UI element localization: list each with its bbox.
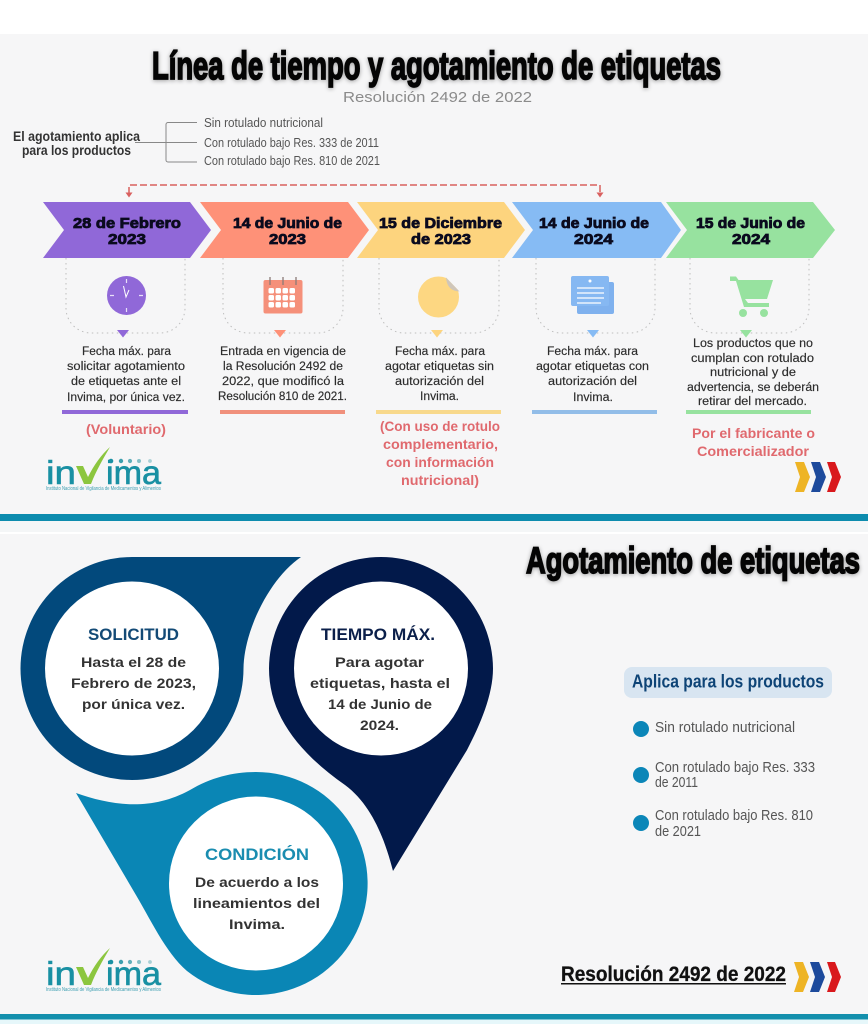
step 2: 14 de Junio de 2023: 2022, que modificó la <box>222 376 345 388</box>
bracket connector <box>135 122 197 162</box>
step 5: 15 de Junio de 2024: retirar del mercado. <box>698 396 807 408</box>
step 1: 28 de Febrero 2023: Fecha máx. para <box>82 346 172 358</box>
step 5: 15 de Junio de 2024: nutricional y de <box>710 367 796 379</box>
card: tiempo maximo: 2024. <box>360 717 399 733</box>
icon: sticker <box>418 276 460 318</box>
badge: aplica para los productos <box>624 667 832 698</box>
step 1: 28 de Febrero 2023: de etiquetas ante el <box>71 376 181 388</box>
icon: calendar <box>264 277 302 314</box>
step 2: 14 de Junio de 2023: la Resolución 2492 de <box>223 361 343 373</box>
step 3: 15 de Diciembre de 2023: nutricional) <box>401 473 479 488</box>
step 2: 14 de Junio de 2023: 14 de Junio de <box>233 215 342 232</box>
logo: invima: ima <box>106 454 162 491</box>
icon: document <box>571 276 614 314</box>
icon: tricolor chevrons <box>794 962 841 992</box>
list: productos: Con rotulado bajo Res. 810 <box>655 807 813 824</box>
step 3: 15 de Diciembre de 2023: (Con uso de rotulo <box>380 419 500 434</box>
step 3: 15 de Diciembre de 2023: 15 de Diciembre <box>379 215 502 232</box>
list: productos: Con rotulado bajo Res. 333 <box>655 759 815 776</box>
list: productos <box>633 719 815 840</box>
step 4: 14 de Junio de 2024 <box>512 202 681 414</box>
step 5: 15 de Junio de 2024: Los productos que no <box>693 338 813 350</box>
product list: Sin rotulado nutricional <box>204 115 323 130</box>
step 5: 15 de Junio de 2024 <box>666 202 835 459</box>
step 3: 15 de Diciembre de 2023: con información <box>386 455 494 470</box>
card: solicitud: SOLICITUD <box>88 625 179 644</box>
arrow: dashed range <box>126 185 604 198</box>
step 4: 14 de Junio de 2024: 2024 <box>574 231 614 248</box>
step 4: 14 de Junio de 2024: autorización del <box>548 376 637 388</box>
step 4: 14 de Junio de 2024: Fecha máx. para <box>547 346 639 358</box>
step 3: 15 de Diciembre de 2023: Invima. <box>420 391 459 403</box>
card: solicitud: Hasta el 28 de <box>81 654 186 670</box>
step 3: 15 de Diciembre de 2023 <box>357 202 525 488</box>
list: productos: de 2011 <box>655 774 698 791</box>
card: solicitud: Febrero de 2023, <box>71 675 196 691</box>
logo: invima: ima <box>106 955 162 992</box>
product list: Con rotulado bajo Res. 810 de 2021 <box>204 153 380 168</box>
step 3: 15 de Diciembre de 2023: de 2023 <box>411 231 471 248</box>
step 3: 15 de Diciembre de 2023: Fecha máx. para <box>395 346 486 358</box>
step 2: 14 de Junio de 2023: Resolución 810 de 2021. <box>218 391 347 403</box>
step 5: 15 de Junio de 2024: 2024 <box>732 231 771 248</box>
logo: invima <box>46 948 162 993</box>
footer: resolucion: Resolución 2492 de 2022 <box>561 963 786 986</box>
panel: agotamiento <box>0 534 868 1024</box>
subtitle: Resolución 2492 de 2022 <box>343 89 532 106</box>
icon: shopping cart <box>730 276 773 317</box>
card: condicion: CONDICIÓN <box>205 845 309 864</box>
step 3: 15 de Diciembre de 2023: agotar etiquetas sin <box>385 361 494 373</box>
card: solicitud <box>21 557 301 780</box>
card: condicion: De acuerdo a los <box>195 874 319 890</box>
card: tiempo maximo <box>269 557 493 871</box>
logo: invima: Instituto Nacional de Vigilancia de Medicamentos y Alimentos <box>46 987 161 993</box>
scope label: El agotamiento aplica <box>13 129 140 144</box>
step 5: 15 de Junio de 2024: Comercializador <box>697 444 810 459</box>
badge: aplica para los productos: Aplica para los productos <box>632 672 824 692</box>
logo: invima: in <box>46 454 76 491</box>
card: tiempo maximo: 14 de Junio de <box>328 696 432 712</box>
step 1: 28 de Febrero 2023: Invima, por única vez. <box>67 392 185 404</box>
step 5: 15 de Junio de 2024: Por el fabricante o <box>692 426 815 441</box>
logo: invima: in <box>46 955 76 992</box>
step 1: 28 de Febrero 2023: 28 de Febrero <box>73 215 181 232</box>
card: condicion: lineamientos del <box>193 895 320 911</box>
card: condicion: Invima. <box>229 916 285 932</box>
step 2: 14 de Junio de 2023: Entrada en vigencia de <box>220 346 346 358</box>
scope label <box>13 129 140 158</box>
step 5: 15 de Junio de 2024: advertencia, se deberán <box>687 382 819 394</box>
card: tiempo maximo: TIEMPO MÁX. <box>321 625 435 644</box>
step 3: 15 de Diciembre de 2023: complementario, <box>383 437 498 452</box>
logo: invima: Instituto Nacional de Vigilancia de Medicamentos y Alimentos <box>46 486 161 492</box>
list: productos: de 2021 <box>655 823 701 840</box>
step 4: 14 de Junio de 2024: agotar etiquetas con <box>536 361 649 373</box>
step 1: 28 de Febrero 2023: (Voluntario) <box>86 422 166 437</box>
step 1: 28 de Febrero 2023: solicitar agotamiento <box>67 361 185 373</box>
step 3: 15 de Diciembre de 2023: autorización del <box>395 376 484 388</box>
step 5: 15 de Junio de 2024: 15 de Junio de <box>696 215 805 232</box>
logo: invima <box>46 447 162 492</box>
step 4: 14 de Junio de 2024: 14 de Junio de <box>539 215 649 232</box>
product list: Con rotulado bajo Res. 333 de 2011 <box>204 135 379 150</box>
step 4: 14 de Junio de 2024: Invima. <box>573 392 613 404</box>
product list <box>204 115 380 168</box>
icon: tricolor chevrons <box>795 462 841 492</box>
step 2: 14 de Junio de 2023 <box>200 202 369 414</box>
card: solicitud: por única vez. <box>82 696 185 712</box>
step 1: 28 de Febrero 2023 <box>43 202 211 437</box>
step 5: 15 de Junio de 2024: cumplan con rotulado <box>691 353 814 365</box>
list: productos: Sin rotulado nutricional <box>655 719 795 736</box>
card: tiempo maximo: Para agotar <box>335 654 425 670</box>
step 1: 28 de Febrero 2023: 2023 <box>108 231 146 248</box>
icon: clock <box>107 276 146 315</box>
step 2: 14 de Junio de 2023: 2023 <box>269 231 306 248</box>
scope label: para los productos <box>22 143 131 158</box>
card: condicion <box>76 772 368 995</box>
panel: timeline <box>0 34 868 532</box>
card: tiempo maximo: etiquetas, hasta el <box>310 675 450 691</box>
